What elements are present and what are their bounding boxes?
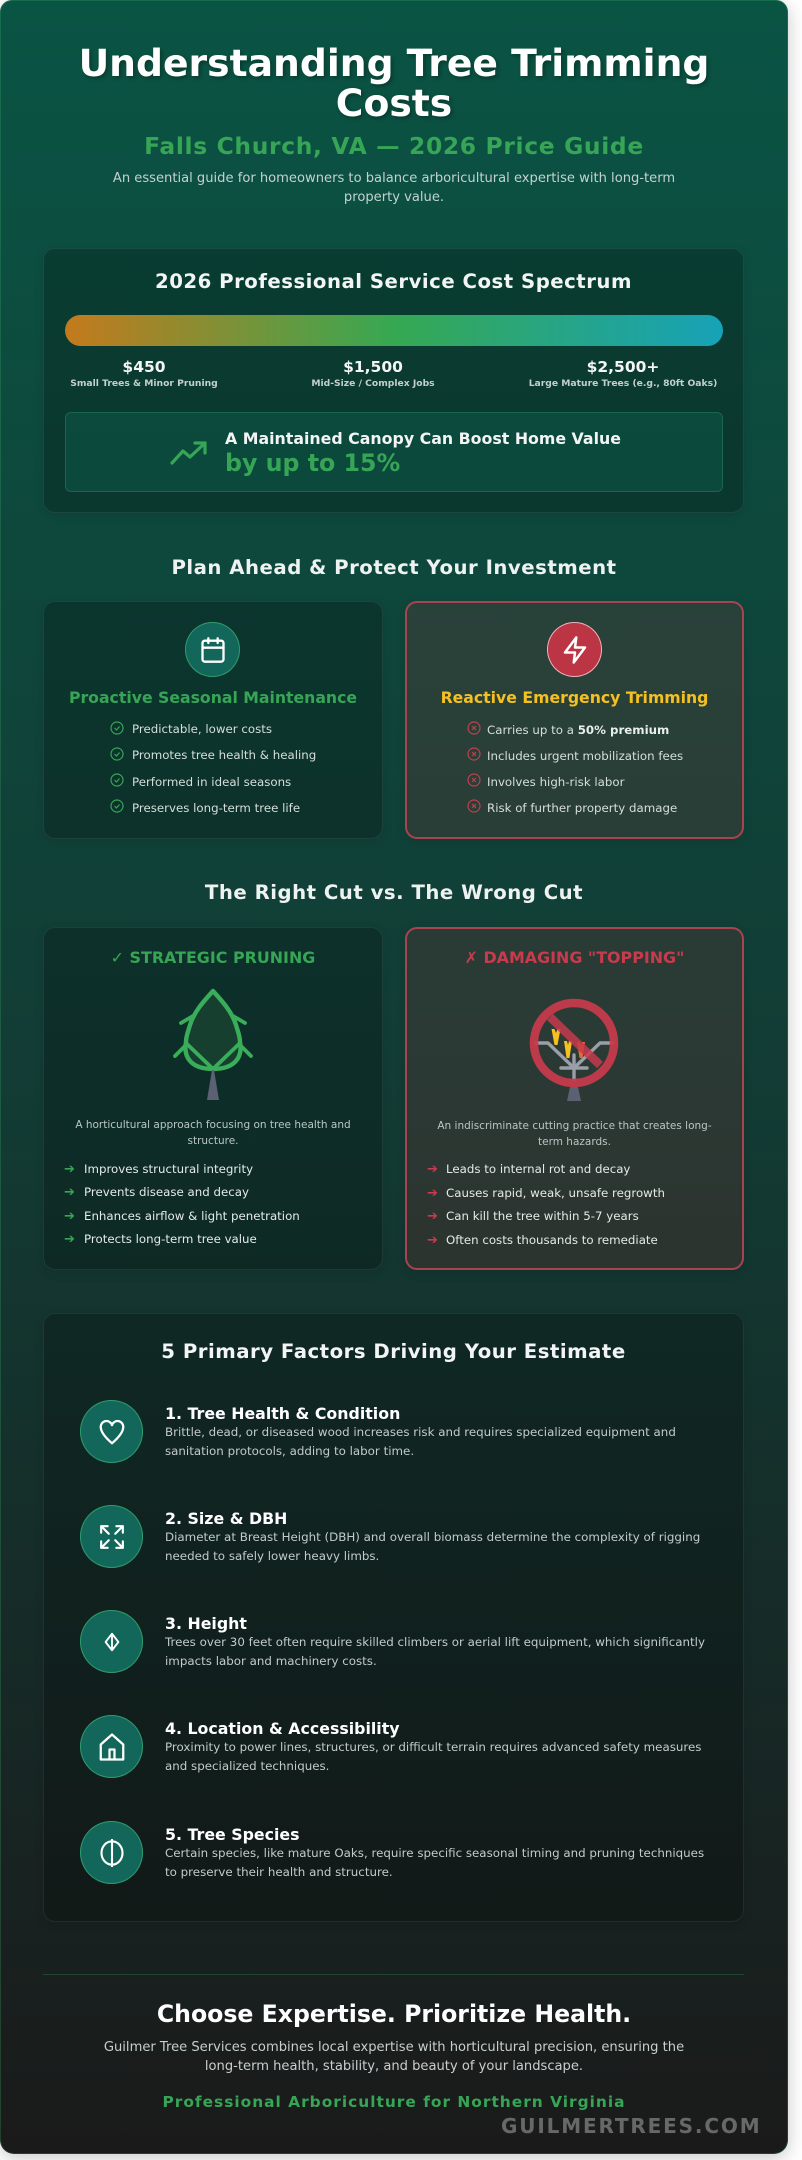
risk list: ➔ <box>427 1186 438 1201</box>
intro text: property value. <box>344 190 444 205</box>
factor 2: needed to safely lower heavy limbs. <box>165 1549 379 1563</box>
header <box>79 41 709 205</box>
risk list: ➔ <box>427 1162 438 1177</box>
benefit list: Preserves long-term tree life <box>132 801 300 815</box>
benefit list: Prevents disease and decay <box>84 1185 249 1199</box>
benefit list: ➔ <box>64 1209 75 1224</box>
panel: strategic pruning <box>43 927 383 1270</box>
factor 5: 5. Tree Species <box>165 1825 300 1844</box>
factor 5: Certain species, like mature Oaks, require specific seasonal timing and pruning techniques <box>165 1846 704 1860</box>
cost point: $2,500+: $2,500+ <box>587 358 659 376</box>
factor 4 <box>80 1715 701 1778</box>
icon: house <box>80 1715 143 1778</box>
benefit list: Predictable, lower costs <box>132 722 272 736</box>
illustration: healthy pruned tree <box>173 988 253 1100</box>
factor 1 <box>80 1400 676 1463</box>
intro text: An essential guide for homeowners to balance arboricultural expertise with long-term <box>113 171 675 186</box>
risk list: ➔ <box>427 1209 438 1224</box>
risk list <box>467 721 683 815</box>
panel: damaging topping <box>405 927 744 1270</box>
callout highlight: by up to 15% <box>225 449 400 477</box>
factor 2: Diameter at Breast Height (DBH) and overall biomass determine the complexity of rigging <box>165 1530 700 1544</box>
risk list: Causes rapid, weak, unsafe regrowth <box>446 1186 665 1200</box>
factor 4: and specialized techniques. <box>165 1759 329 1773</box>
footer <box>104 2000 761 2138</box>
heading: 2026 Professional Service Cost Spectrum <box>155 270 632 293</box>
heading: 5 Primary Factors Driving Your Estimate <box>161 1340 626 1363</box>
callout: home value <box>65 412 723 492</box>
risk list <box>427 1162 665 1248</box>
description: An indiscriminate cutting practice that creates long- <box>437 1120 712 1132</box>
cost point: $450: Small Trees & Minor Pruning <box>70 378 218 389</box>
description: A horticultural approach focusing on tree health and <box>75 1119 351 1131</box>
factor 3: impacts labor and machinery costs. <box>165 1654 377 1668</box>
benefit list: ➔ <box>64 1185 75 1200</box>
icon: expand arrows <box>80 1505 143 1568</box>
factor 3: 3. Height <box>165 1614 247 1633</box>
risk list: Often costs thousands to remediate <box>446 1233 658 1247</box>
tagline: Professional Arboriculture for Northern Virginia <box>162 2093 626 2111</box>
risk list: Risk of further property damage <box>487 801 677 815</box>
panel: cost spectrum <box>43 248 744 513</box>
footer text: long-term health, stability, and beauty of your landscape. <box>205 2059 583 2074</box>
factor 4: Proximity to power lines, structures, or difficult terrain requires advanced safety measures <box>165 1740 701 1754</box>
card title: Proactive Seasonal Maintenance <box>69 688 357 707</box>
cost point: $1,500: Mid-Size / Complex Jobs <box>311 378 435 389</box>
panel: reactive emergency <box>405 601 744 839</box>
icon: leaf circle <box>80 1821 143 1884</box>
risk list: Includes urgent mobilization fees <box>487 749 683 763</box>
icon: height <box>80 1610 143 1673</box>
description <box>437 1120 712 1148</box>
factor 1: 1. Tree Health & Condition <box>165 1404 400 1423</box>
factor 3: Trees over 30 feet often require skilled climbers or aerial lift equipment, which significantly <box>165 1635 705 1649</box>
benefit list: Performed in ideal seasons <box>132 775 291 789</box>
footer text: Guilmer Tree Services combines local expertise with horticultural precision, ensuring the <box>104 2040 684 2055</box>
icon: heart <box>80 1400 143 1463</box>
factor 1: Brittle, dead, or diseased wood increases risk and requires specialized equipment and <box>165 1425 676 1439</box>
card title: ✗ DAMAGING "TOPPING" <box>465 948 684 967</box>
title: Understanding Tree Trimming Costs <box>79 41 709 124</box>
heading: plan ahead: Plan Ahead & Protect Your Investment <box>171 556 617 579</box>
risk list: ➔ <box>427 1233 438 1248</box>
factor 4: 4. Location & Accessibility <box>165 1719 400 1738</box>
risk list: Carries up to a 50% premium <box>487 723 669 737</box>
callout text: A Maintained Canopy Can Boost Home Value <box>225 429 621 448</box>
benefit list: ➔ <box>64 1232 75 1247</box>
risk list: Can kill the tree within 5-7 years <box>446 1209 639 1223</box>
footer text <box>104 2040 684 2074</box>
intro text <box>113 171 675 205</box>
factor 1: sanitation protocols, adding to labor time. <box>165 1444 414 1458</box>
subtitle: Falls Church, VA — 2026 Price Guide <box>144 132 644 160</box>
icon: trending up <box>170 441 207 465</box>
description: structure. <box>188 1135 238 1147</box>
benefit list: Promotes tree health & healing <box>132 748 316 762</box>
factor 2: 2. Size & DBH <box>165 1509 287 1528</box>
panel: proactive maintenance <box>43 601 383 839</box>
factor 2 <box>80 1505 700 1568</box>
risk list: Leads to internal rot and decay <box>446 1162 630 1176</box>
benefit list: Protects long-term tree value <box>84 1232 257 1246</box>
benefit list: ➔ <box>64 1162 75 1177</box>
cost point: $2,500+ <box>529 358 717 389</box>
benefit list: Enhances airflow & light penetration <box>84 1209 300 1223</box>
cost point: $450 <box>70 358 218 389</box>
illustration: topped tree prohibited <box>530 998 618 1101</box>
factor 5 <box>80 1821 704 1884</box>
heading: right vs wrong cut: The Right Cut vs. The Wrong Cut <box>205 881 583 904</box>
gradient cost bar <box>65 315 723 346</box>
watermark: GUILMERTREES.COM <box>501 2114 761 2138</box>
icon: lightning <box>547 622 602 677</box>
cost point: $1,500: $1,500 <box>343 358 403 376</box>
factor 3 <box>80 1610 705 1673</box>
cost point: $2,500+: Large Mature Trees (e.g., 80ft Oaks) <box>529 378 717 389</box>
benefit list: Improves structural integrity <box>84 1162 253 1176</box>
description <box>75 1119 351 1147</box>
benefit list <box>64 1162 300 1247</box>
risk list: Involves high-risk labor <box>487 775 624 789</box>
footer heading: Choose Expertise. Prioritize Health. <box>157 2000 631 2028</box>
factor 5: to preserve their health and structure. <box>165 1865 393 1879</box>
cost point: $1,500 <box>311 358 435 389</box>
card title: Reactive Emergency Trimming <box>441 688 708 707</box>
cost point: $450: $450 <box>122 358 166 376</box>
description: term hazards. <box>538 1136 611 1148</box>
card title: ✓ STRATEGIC PRUNING <box>111 948 315 967</box>
benefit list <box>110 721 316 815</box>
icon: calendar <box>185 622 240 677</box>
panel: five factors <box>43 1313 744 1922</box>
